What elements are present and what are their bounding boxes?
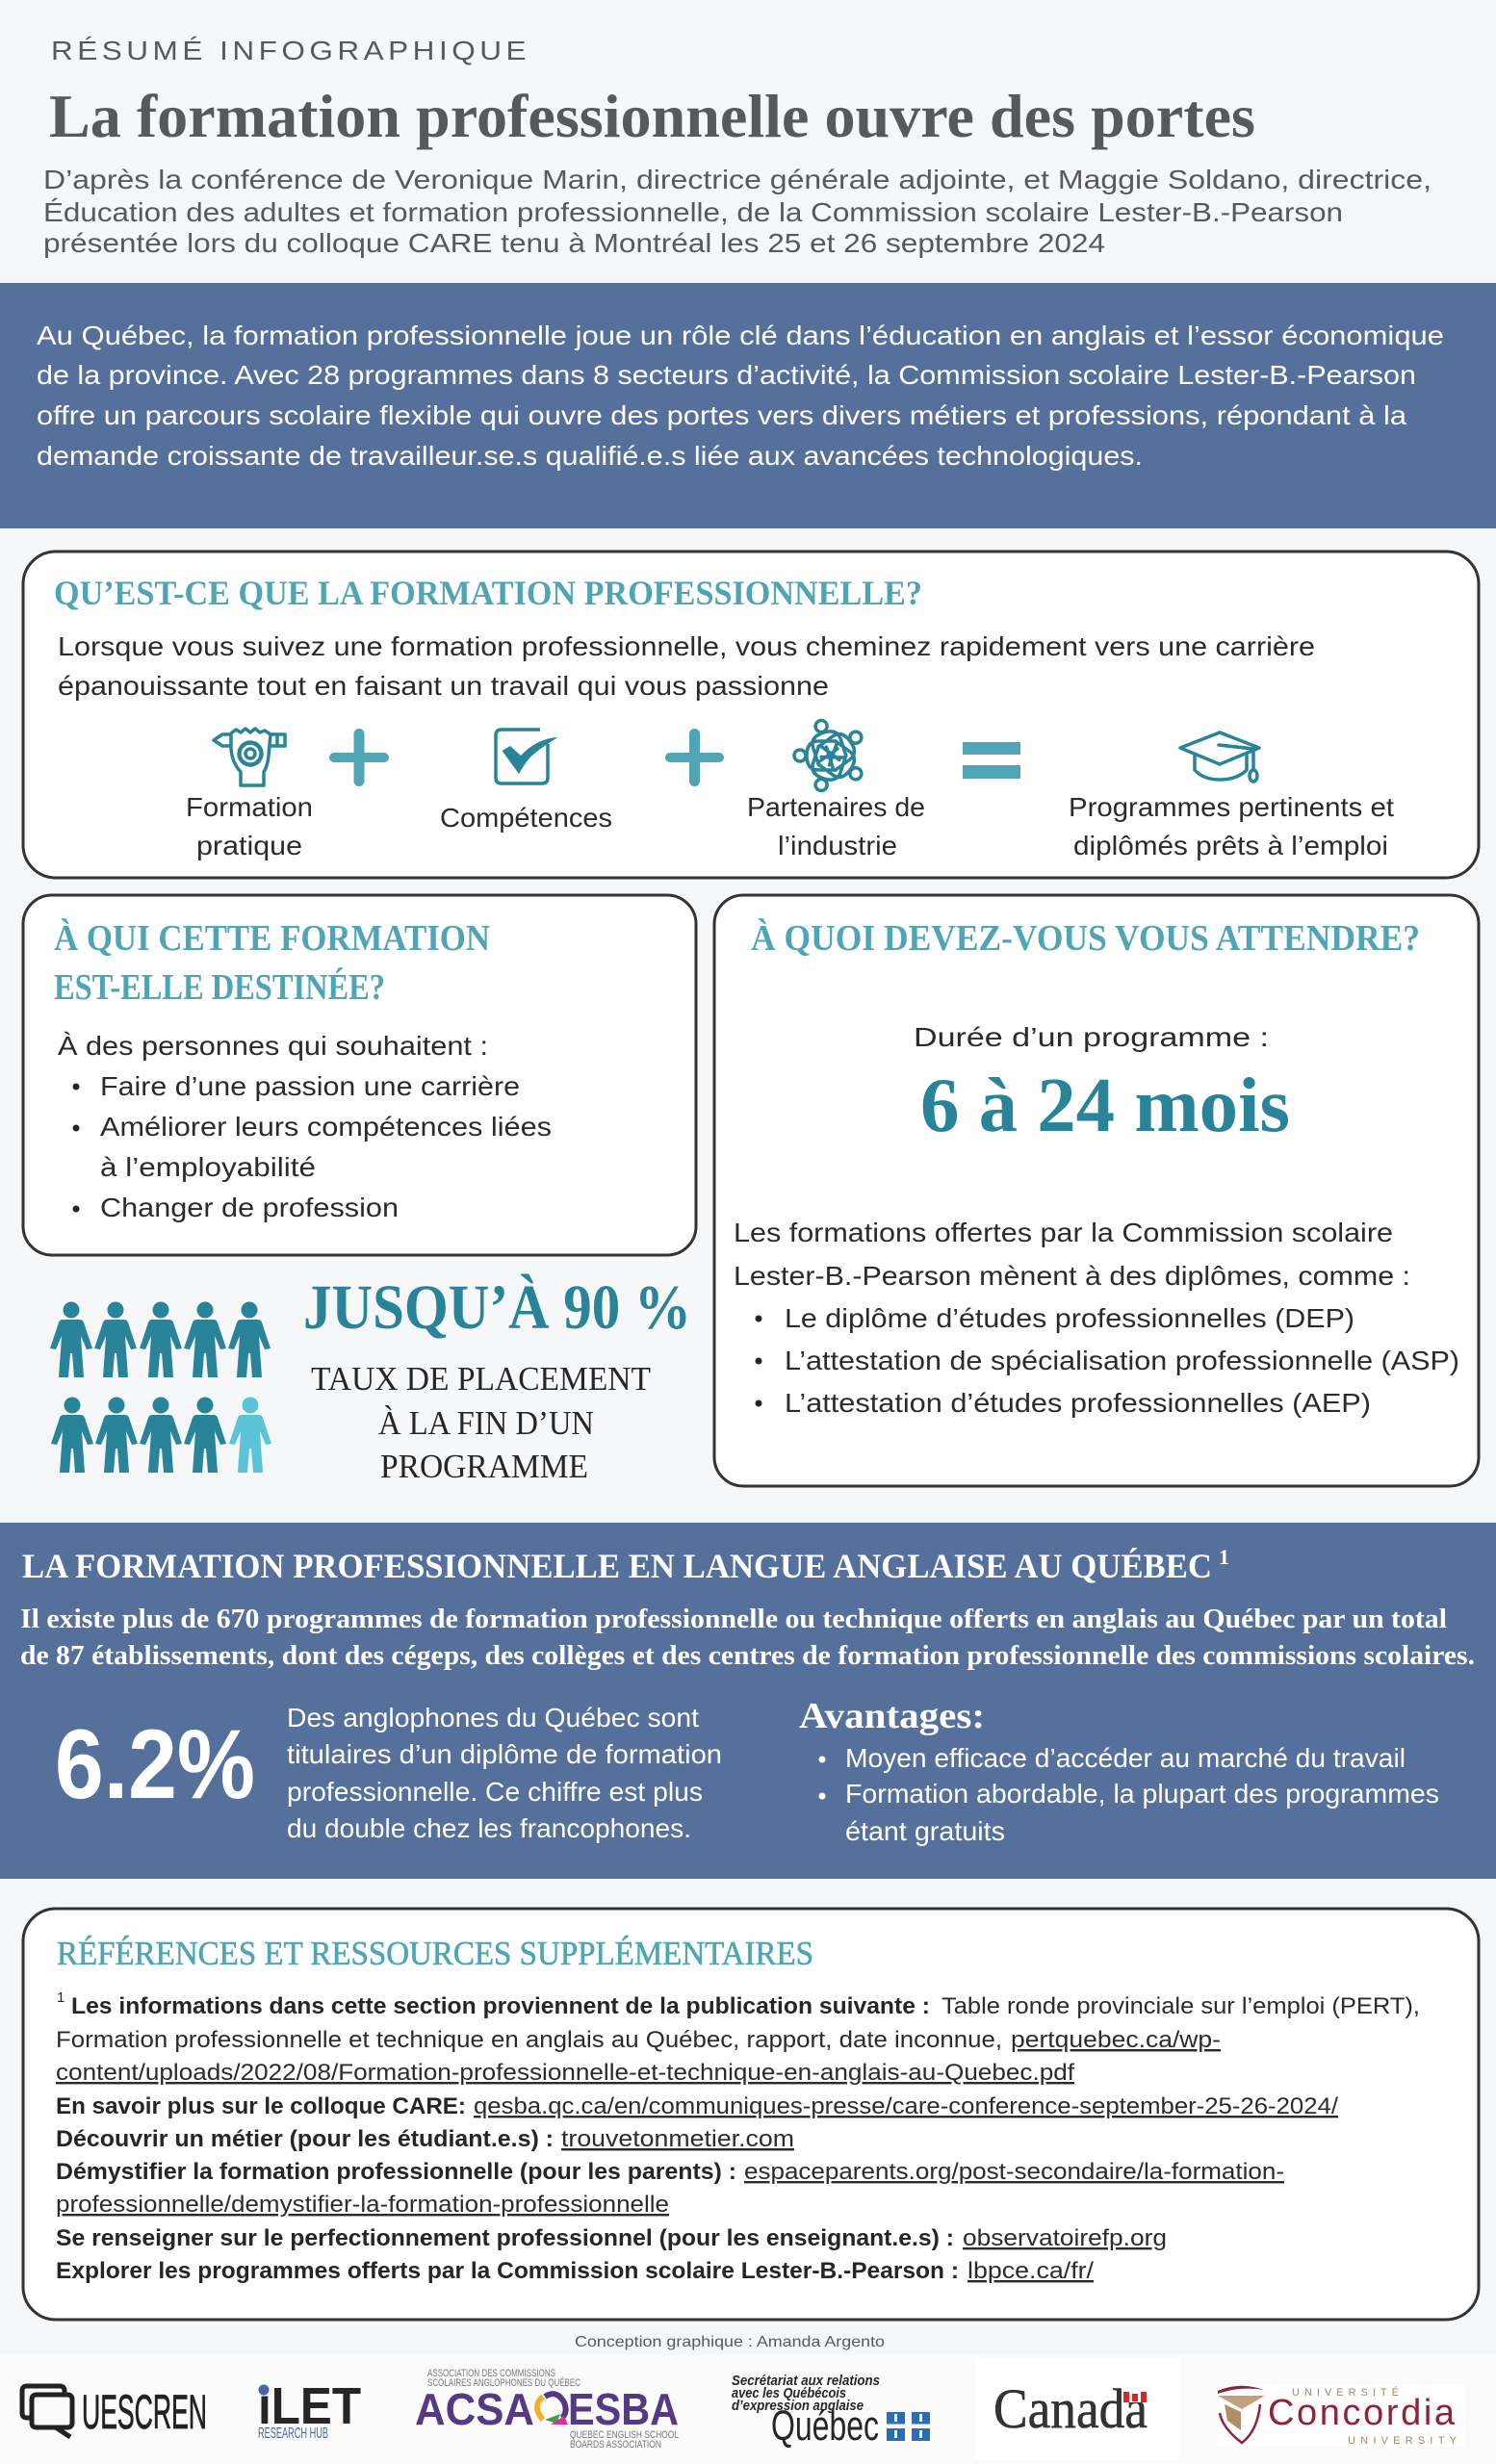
icon: plus xyxy=(329,729,389,786)
advantages list: étant gratuits xyxy=(845,1816,1005,1846)
label: formation pratique: Formation xyxy=(186,792,313,822)
logo: Québec secretariat: Québec xyxy=(771,2402,879,2450)
logo: ACSA QESBA: ESBA xyxy=(568,2384,679,2434)
label: formation pratique: pratique xyxy=(196,831,302,860)
label: partenaires de l'industrie: Partenaires de xyxy=(747,792,925,822)
reference list: observatoirefp.org xyxy=(963,2225,1167,2251)
pictogram: people 90 percent xyxy=(50,1301,271,1473)
statistic: taux de placement: À LA FIN D’UN xyxy=(378,1404,594,1442)
subtitle: Éducation des adultes et formation professionnelle, de la Commission scolaire Lester-B.-Pearson xyxy=(43,197,1343,227)
logo: Concordia University: UNIVERSITÉ xyxy=(1292,2386,1405,2399)
audience list xyxy=(58,1031,552,1222)
diploma list xyxy=(734,1218,1459,1418)
statistic description: Des anglophones du Québec sont xyxy=(287,1703,699,1732)
icon: partners circle xyxy=(794,716,869,795)
heading: À QUI CETTE FORMATION xyxy=(54,918,490,959)
panel: introduction: de la province. Avec 28 programmes dans 8 secteurs d’activité, la Commission scolaire Lester-B.-Pearson xyxy=(37,360,1416,390)
panel: formation en langue anglaise xyxy=(0,1523,1496,1879)
panel: introduction: offre un parcours scolaire flexible qui ouvre des portes vers divers métiers et professions, répondant à la xyxy=(37,400,1406,430)
panel: introduction: demande croissante de travailleur.se.s qualifié.e.s liée aux avancées technologiques. xyxy=(37,441,1143,471)
logo: ACSA QESBA xyxy=(415,2368,679,2451)
audience list: À des personnes qui souhaitent : xyxy=(58,1031,488,1061)
logo: ACSA QESBA: BOARDS ASSOCIATION xyxy=(570,2439,661,2451)
logo: QUESCREN xyxy=(22,2385,207,2439)
audience list: Faire d’une passion une carrière xyxy=(100,1071,520,1101)
label: durée: Durée d’un programme : xyxy=(914,1022,1269,1052)
diploma list: L’attestation de spécialisation professionnelle (ASP) xyxy=(785,1346,1459,1375)
statistic description: du double chez les francophones. xyxy=(287,1813,691,1843)
icon: plus xyxy=(665,729,724,786)
header xyxy=(43,36,1432,258)
reference list: lbpce.ca/fr/ xyxy=(967,2258,1094,2284)
audience list: à l’employabilité xyxy=(100,1152,316,1182)
statistic description: titulaires d’un diplôme de formation xyxy=(287,1739,722,1769)
label: programmes pertinents xyxy=(1069,792,1394,860)
reference list: Les informations dans cette section proviennent de la publication suivante : xyxy=(71,1993,930,2019)
logo: QUESCREN: UESCREN xyxy=(82,2385,207,2439)
heading: 1 xyxy=(1219,1545,1229,1569)
diploma list: L’attestation d’études professionnelles (AEP) xyxy=(785,1388,1371,1418)
eyebrow label: RÉSUMÉ INFOGRAPHIQUE xyxy=(51,36,530,65)
label: programmes pertinents: Programmes pertinents et xyxy=(1069,792,1394,822)
panel: introduction: Au Québec, la formation professionnelle joue un rôle clé dans l’éducation en anglais et l’essor économique xyxy=(37,321,1444,350)
heading: LA FORMATION PROFESSIONNELLE EN LANGUE ANGLAISE AU QUÉBEC xyxy=(22,1547,1212,1585)
audience list: Améliorer leurs compétences liées xyxy=(100,1112,552,1142)
reference list: trouvetonmetier.com xyxy=(561,2126,794,2152)
paragraph: de 87 établissements, dont des cégeps, des collèges et des centres de formation professionnelle des commissions scolaires. xyxy=(20,1641,1475,1671)
reference list: Découvrir un métier (pour les étudiant.e.s) : xyxy=(56,2126,554,2152)
reference list: content/uploads/2022/08/Formation-professionnelle-et-technique-en-anglais-au-Quebec.pdf xyxy=(56,2060,1074,2086)
panel: à quoi devez-vous vous attendre xyxy=(714,895,1479,1486)
advantages list xyxy=(799,1696,1439,1846)
label: formation pratique xyxy=(186,792,313,860)
statistic description xyxy=(287,1703,722,1843)
logo: ACSA QESBA: SCOLAIRES ANGLOPHONES DU QUÉBEC xyxy=(427,2376,580,2389)
statistic description: professionnelle. Ce chiffre est plus xyxy=(287,1777,703,1807)
paragraph xyxy=(20,1604,1475,1671)
audience list: Changer de profession xyxy=(100,1193,399,1222)
icon: checkbox xyxy=(496,730,558,783)
icon: equals xyxy=(963,742,1020,779)
advantages list: Avantages: xyxy=(799,1696,985,1736)
statistic: taux de placement: JUSQU’À 90 % xyxy=(303,1272,691,1343)
description xyxy=(58,631,1315,701)
label: programmes pertinents: diplômés prêts à l’emploi xyxy=(1073,831,1388,860)
logo: Québec secretariat: d’expression anglaise xyxy=(732,2398,864,2414)
advantages list: Formation abordable, la plupart des programmes xyxy=(845,1779,1439,1809)
reference list: En savoir plus sur le colloque CARE: xyxy=(56,2093,466,2119)
logo: Canada: Canada xyxy=(993,2377,1148,2440)
panel: qu'est-ce que la formation professionnelle xyxy=(23,552,1479,878)
description: Lorsque vous suivez une formation professionnelle, vous cheminez rapidement vers une carrière xyxy=(58,631,1315,661)
reference list: Explorer les programmes offerts par la Commission scolaire Lester-B.-Pearson : xyxy=(56,2258,959,2284)
panel: références xyxy=(23,1909,1479,2320)
logo: Concordia University xyxy=(1217,2385,1464,2447)
reference list: Démystifier la formation professionnelle (pour les parents) : xyxy=(56,2159,736,2185)
logo: Concordia University: UNIVERSITY xyxy=(1348,2435,1462,2447)
panel: à qui cette formation est-elle destinée xyxy=(23,895,696,1255)
label: partenaires de l'industrie xyxy=(747,792,925,860)
paragraph: Il existe plus de 670 programmes de formation professionnelle ou technique offerts en anglais au Québec par un total xyxy=(20,1604,1447,1634)
logo: Concordia University: Concordia xyxy=(1268,2393,1456,2433)
diploma list: Lester-B.-Pearson mènent à des diplômes, comme : xyxy=(734,1261,1410,1291)
logo: iLET research hub: RESEARCH HUB xyxy=(258,2426,328,2442)
diploma list: Le diplôme d’études professionnelles (DEP) xyxy=(785,1303,1354,1333)
logo: Québec secretariat: avec les Québécois xyxy=(732,2385,846,2401)
heading: EST-ELLE DESTINÉE? xyxy=(54,967,385,1008)
reference list: 1 xyxy=(57,1989,64,2006)
statistic: taux de placement: TAUX DE PLACEMENT xyxy=(311,1360,651,1398)
title: La formation professionnelle ouvre des portes xyxy=(49,82,1255,150)
statistic: taux de placement xyxy=(303,1272,691,1485)
label: partenaires de l'industrie: l’industrie xyxy=(778,831,897,860)
statistic: taux de placement: PROGRAMME xyxy=(380,1448,588,1485)
reference list: qesba.qc.ca/en/communiques-presse/care-conference-september-25-26-2024/ xyxy=(474,2093,1338,2119)
reference list: professionnelle/demystifier-la-formation-professionnelle xyxy=(56,2192,669,2218)
statistic: 6.2%: 6.2% xyxy=(55,1709,255,1819)
reference list xyxy=(56,1989,1420,2284)
logo: Québec secretariat xyxy=(732,2373,930,2450)
subtitle xyxy=(43,165,1432,258)
subtitle: présentée lors du colloque CARE tenu à Montréal les 25 et 26 septembre 2024 xyxy=(43,228,1105,258)
reference list: espaceparents.org/post-secondaire/la-formation- xyxy=(744,2159,1284,2185)
logo: Canada xyxy=(975,2358,1179,2460)
heading: À QUOI DEVEZ-VOUS VOUS ATTENDRE? xyxy=(751,918,1420,959)
subtitle: D’après la conférence de Veronique Marin, directrice générale adjointe, et Maggie Soldano, directrice, xyxy=(43,165,1432,194)
logo: ACSA QESBA: ACSA xyxy=(415,2384,534,2434)
panel: introduction xyxy=(0,283,1496,528)
icon: graduation cap xyxy=(1180,732,1259,782)
reference list: Formation professionnelle et technique en anglais au Québec, rapport, date inconnue, xyxy=(56,2027,1002,2053)
logo: ACSA QESBA: ASSOCIATION DES COMMISSIONS xyxy=(427,2368,555,2379)
statistic: 6 à 24 mois: 6 à 24 mois xyxy=(920,1064,1290,1148)
logo: ACSA QESBA: QUEBEC ENGLISH SCHOOL xyxy=(570,2429,679,2441)
logo: iLET research hub: ıLET xyxy=(258,2377,361,2435)
icon: hand holding pencil with gear xyxy=(214,729,285,785)
advantages list: Moyen efficace d’accéder au marché du travail xyxy=(845,1743,1406,1773)
diploma list: Les formations offertes par la Commission scolaire xyxy=(734,1218,1393,1247)
reference list: pertquebec.ca/wp- xyxy=(1011,2027,1221,2053)
credit: Conception graphique : Amanda Argento xyxy=(575,2334,885,2350)
heading xyxy=(54,918,490,1008)
heading: QU’EST-CE QUE LA FORMATION PROFESSIONNELLE? xyxy=(54,574,922,612)
reference list: Table ronde provinciale sur l’emploi (PERT), xyxy=(941,1993,1420,2019)
label: compétences: Compétences xyxy=(440,803,612,833)
logo: Québec secretariat: Secrétariat aux relations xyxy=(732,2373,880,2389)
description: épanouissante tout en faisant un travail qui vous passionne xyxy=(58,671,829,701)
heading: RÉFÉRENCES ET RESSOURCES SUPPLÉMENTAIRES xyxy=(57,1935,813,1972)
reference list: Se renseigner sur le perfectionnement professionnel (pour les enseignant.e.s) : xyxy=(56,2225,954,2251)
